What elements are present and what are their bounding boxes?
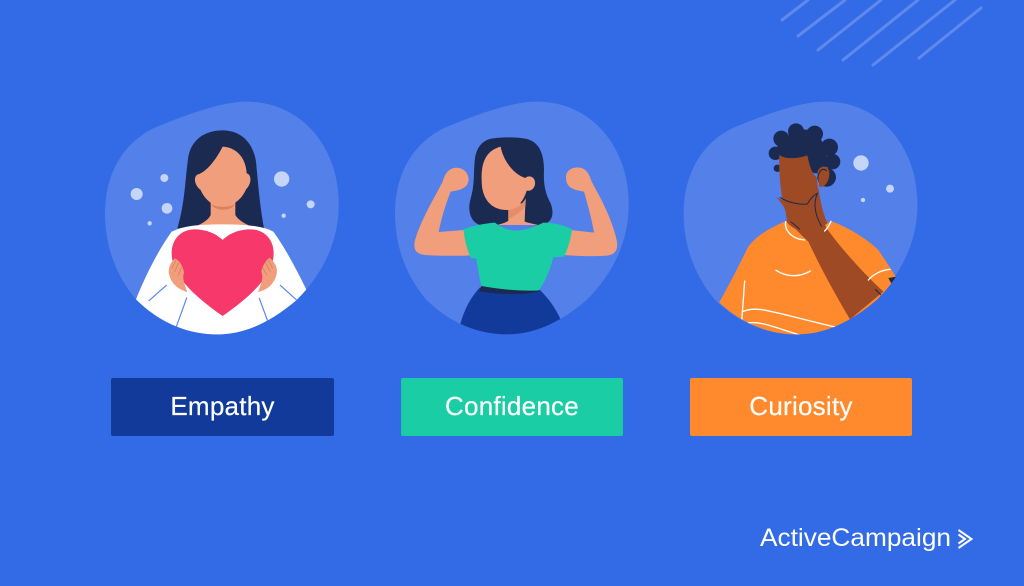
skirt [460,288,560,334]
decorative diagonal lines [782,0,981,65]
icon: floating dots [853,155,894,202]
label: Empathy: Empathy [170,391,275,421]
neck [497,203,538,225]
logo chevron [958,530,972,548]
arm and hand [777,193,883,319]
hands [169,258,187,292]
label: Curiosity [690,378,912,436]
hair [469,137,552,225]
label: Curiosity: Curiosity [749,391,853,421]
ear [817,166,829,187]
shirt lines [742,221,890,335]
figure: thinking man [713,123,897,343]
orange shirt [719,221,896,334]
logo wordmark: ActiveCampaign [760,524,951,552]
face [779,155,818,203]
background blob [684,102,917,334]
background blob [395,102,629,334]
sleeve lines [149,285,297,327]
neck [198,202,249,226]
panel: empathy illustration [105,102,339,343]
curly hair [769,123,840,187]
neck [786,187,828,229]
label: Empathy [111,378,334,436]
label: Confidence [401,378,623,436]
background blob [105,102,339,334]
label: Confidence: Confidence [445,391,579,421]
figure: woman holding heart [136,130,307,343]
waistband [479,286,540,294]
icon: floating dots [131,171,315,225]
figure: woman flexing arms [414,137,617,343]
left arm [414,168,471,256]
heart [172,229,274,316]
right arm [564,167,617,256]
panel: curiosity illustration [684,102,917,343]
green top [463,223,572,291]
hair [177,130,264,228]
white top [136,224,307,343]
face [195,147,250,207]
face [482,147,535,210]
panel: confidence illustration [395,102,629,343]
